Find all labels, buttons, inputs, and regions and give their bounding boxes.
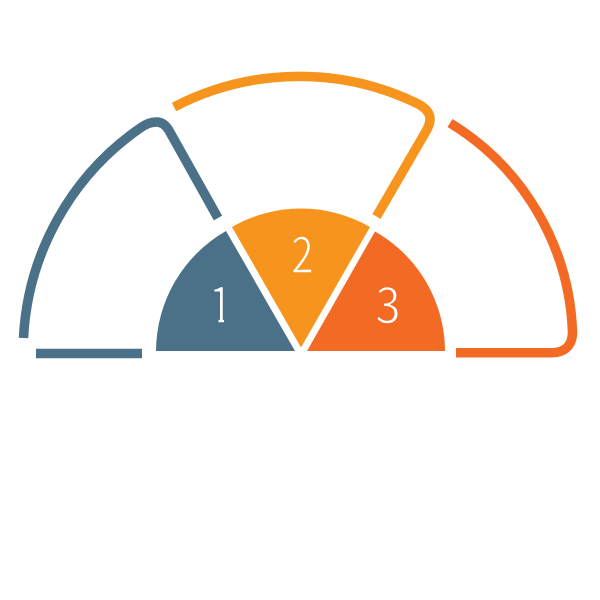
- number 2: 2: [291, 214, 314, 288]
- segment 1: blue outline: [24, 122, 218, 354]
- wedge 3: red-orange with number: [307, 232, 445, 351]
- segment 2: orange outline: [174, 76, 430, 216]
- wedge 2: orange with number: [232, 209, 370, 348]
- number 3: 3: [375, 265, 401, 338]
- infographic: three-part semicircle diagram: [18, 72, 578, 358]
- wedge 1: blue with number: [156, 231, 295, 351]
- number 1: 1: [208, 264, 233, 338]
- segment 3: red-orange outline: [450, 123, 572, 353]
